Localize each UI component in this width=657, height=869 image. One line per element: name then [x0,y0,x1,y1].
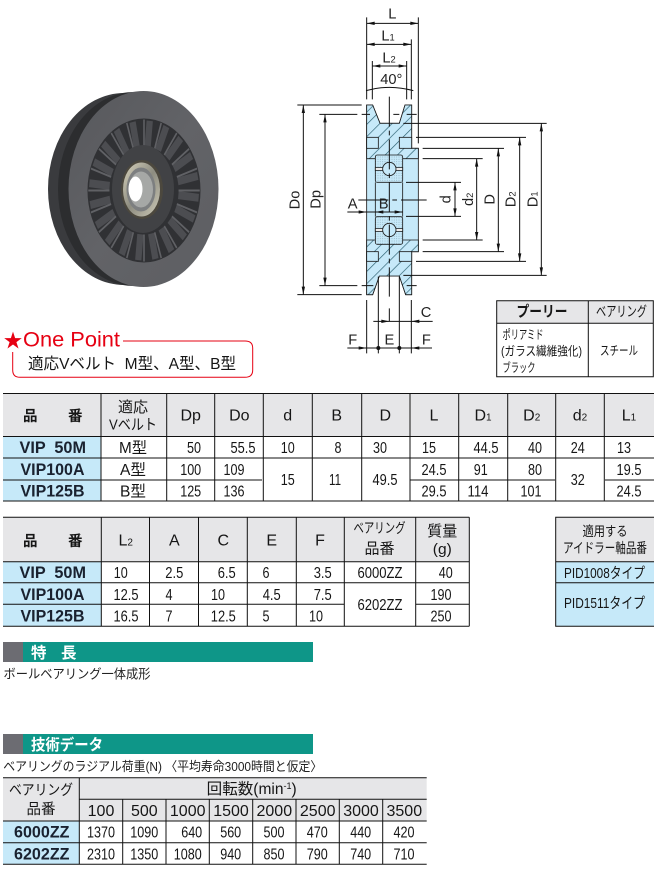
material table: ブラック [502,360,536,375]
dimension labels: F [348,332,357,348]
header row: ベアリング [354,520,406,536]
inner sleeve lines [375,182,403,217]
dimension labels: 40° [380,72,402,88]
header row: Do [229,408,250,424]
material table: ポリアミド [502,328,544,342]
row VIP 50M: 10 [281,440,295,457]
row VIP 50M: 2.5 [165,565,183,582]
row VIP125B: 29.5 [422,484,447,500]
row 6202ZZ: 940 [220,846,241,864]
hatched top half [367,105,418,159]
header cells: 3500 [387,803,422,820]
dimension lines and arrows [297,17,547,353]
spec table 2 [3,517,469,626]
row 6202ZZ: 850 [264,846,285,864]
section heading: technical data: 技術データ [31,735,103,754]
top bearing [375,155,403,182]
recessed rib area [88,118,200,262]
row VIP 50M: 40 [439,565,453,582]
dimension labels: Dp [308,190,324,209]
row VIP100A: 12.5 [114,587,139,604]
row VIP100A: A型 [120,461,146,479]
header row: A [169,532,180,550]
header cells: 1000 [170,803,206,820]
dimension labels: L1 [381,29,395,45]
row 6000ZZ: 470 [307,824,328,842]
dimension labels: B [379,196,389,212]
section heading: features: 特長 [31,643,77,662]
header row: 品番 [23,408,83,425]
belt type text: 適応Vベルト M型、A型、B型 [28,355,236,373]
row 6202ZZ: 1080 [174,846,202,864]
row VIP 50M: 6.5 [218,565,236,582]
row VIP 50M: 15 [422,440,436,457]
star icon: ★ [4,331,23,352]
row VIP100A: 19.5 [616,462,642,479]
row VIP125B: 136 [224,484,245,500]
row VIP 50M: 10 [114,565,128,582]
header cells: 100 [88,803,114,820]
row VIP125B: 10 [309,609,323,626]
header row [23,520,457,558]
header row: Vベルト [109,416,157,434]
header row: L2 [118,532,133,550]
row VIP100A: 10 [211,587,225,604]
row VIP125B: 101 [520,484,542,500]
row VIP100A: 4.5 [263,587,281,604]
row VIP 50M: 50 [187,440,201,457]
header row: E [266,532,277,550]
dimension labels: d [439,195,455,203]
row 6202ZZ [14,846,415,864]
header cells [9,780,422,820]
dimension labels: D [483,194,499,205]
header row: d2 [573,408,588,424]
dimension labels: D1 [526,191,542,207]
centre hub [112,145,174,233]
row VIP125B: 5 [262,609,270,626]
row VIP100A [20,586,452,614]
header row: D1 [474,408,492,424]
header cells: 2000 [257,803,292,820]
row VIP100A: 190 [430,587,452,604]
header row: L [430,408,439,424]
row VIP 50M: 8 [334,440,342,457]
section heading: features [3,642,313,662]
row VIP 50M: 6000ZZ [358,565,403,582]
row VIP 50M: 40 [528,440,542,457]
pulley back flange [48,93,200,285]
section drawing: pulley cross-section with dimensions [287,6,547,353]
header row: D [380,408,391,424]
header cells: 2500 [300,803,336,820]
header row: D2 [523,408,541,424]
row VIP125B: VIP125B [20,608,85,626]
row VIP100A: 100 [180,462,201,479]
One Point callout [4,328,253,377]
photo: black V-belt pulley [48,91,218,287]
header cells: ) [292,781,297,798]
centre lines [358,97,427,297]
row VIP 50M: 30 [373,440,387,457]
radial load table [3,778,427,864]
header row: d [283,408,292,424]
row VIP100A: 49.5 [372,472,398,489]
row VIP125B: 114 [468,484,489,500]
bearing bore [128,176,142,202]
row 6202ZZ: 2310 [87,846,115,864]
row VIP125B: 250 [430,609,452,626]
row VIP 50M: 3.5 [314,565,332,582]
pulley groove [58,92,210,286]
dimension labels: L2 [382,50,396,66]
header cells: ベアリング [9,782,73,799]
row VIP 50M: 6 [262,565,270,582]
header row: (g) [433,541,452,558]
row VIP100A: 32 [571,472,585,489]
applicable idler shaft table: 適用する [582,524,628,539]
dimension labels: Do [287,191,303,209]
row VIP 50M: VIP 50M [20,564,86,582]
row VIP100A [20,461,642,489]
dimension labels: D2 [503,191,519,207]
row VIP100A: 15 [281,472,295,489]
row VIP125B: 12.5 [211,609,236,626]
header row: 品番 [364,540,394,558]
row VIP125B: 7 [166,609,173,626]
dimension labels: L [388,6,396,22]
row 6000ZZ: 420 [394,824,415,842]
header cells: 500 [131,803,158,820]
One Point heading: One Point [23,328,120,352]
row VIP125B: 125 [180,484,201,500]
row VIP 50M [20,564,453,582]
header row: C [218,532,229,550]
row VIP100A: VIP100A [20,461,85,479]
row VIP100A: 24.5 [422,462,447,479]
spoke pockets [367,137,412,261]
row VIP100A: 7.5 [314,587,332,604]
row 6000ZZ: 6000ZZ [14,824,70,842]
header cells: -1 [283,781,292,791]
dimension labels: A [348,196,358,212]
row VIP100A: 109 [224,462,245,479]
row VIP100A: VIP100A [20,586,85,604]
row VIP100A: 91 [474,462,488,479]
ball bearing [121,160,163,219]
material table: プーリー [516,304,568,320]
dimension labels: C [421,305,432,321]
section heading: technical data [3,734,313,754]
row 6000ZZ: 500 [264,824,285,842]
row 6000ZZ: 440 [350,824,371,842]
row VIP125B: B型 [120,482,146,500]
hatched bottom half [367,240,418,295]
material table [497,301,653,377]
dimension labels [287,6,542,348]
header cells: 回転数(min [207,781,283,798]
header row: Dp [180,408,201,424]
header row: L1 [622,408,637,424]
row VIP100A: 4 [166,587,173,604]
row VIP 50M: 24 [571,440,585,457]
radial load caption: ベアリングのラジアル荷重(N) 〈平均寿命3000時間と仮定〉 [3,759,322,774]
row VIP125B [20,482,642,500]
row 6202ZZ: 6202ZZ [14,846,70,864]
header row: 質量 [427,522,457,540]
header cells: 3000 [343,803,379,820]
radial ribs [88,120,200,262]
spec table 1 [3,394,654,501]
pulley front face [68,91,218,287]
row VIP125B: 24.5 [616,484,642,500]
row VIP 50M: 13 [617,440,631,457]
red rounded frame [13,341,253,377]
row VIP 50M: 55.5 [230,440,256,457]
row VIP100A: 11 [329,472,341,489]
row 6000ZZ: 1090 [130,824,158,842]
row VIP 50M [20,439,631,457]
header cells: 1500 [213,803,249,820]
header row: 品番 [23,533,83,550]
row VIP100A: 6202ZZ [358,597,403,614]
row 6202ZZ: 740 [350,846,371,864]
material table: スチール [600,344,638,358]
header cells: 品番 [26,801,56,818]
row 6202ZZ: 710 [394,846,415,864]
row VIP125B [20,608,452,626]
row VIP 50M: VIP 50M [20,439,86,457]
row VIP125B: VIP125B [20,482,85,500]
bottom bearing [375,217,403,244]
row 6202ZZ: 1350 [130,846,158,864]
row 6000ZZ: 1370 [87,824,115,842]
row VIP 50M: 44.5 [474,440,499,457]
header row: 適応 [118,399,148,416]
header row: F [315,532,325,550]
dimension labels: F [422,332,431,348]
dimension labels: d2 [461,193,477,206]
header row [23,399,637,434]
pulley body section [367,105,418,295]
material table: (ガラス繊維強化) [501,344,582,358]
features text: ボールベアリング一体成形 [4,666,150,682]
dimension labels: E [384,332,394,348]
header row: B [331,408,342,424]
row VIP125B: 16.5 [114,609,139,626]
row 6000ZZ [14,824,415,842]
row 6000ZZ: 560 [220,824,241,842]
row 6202ZZ: 790 [307,846,328,864]
row VIP100A: 80 [528,462,542,479]
applicable idler shaft table [556,517,654,626]
row VIP 50M: M型 [119,439,147,457]
row 6000ZZ: 640 [181,824,202,842]
